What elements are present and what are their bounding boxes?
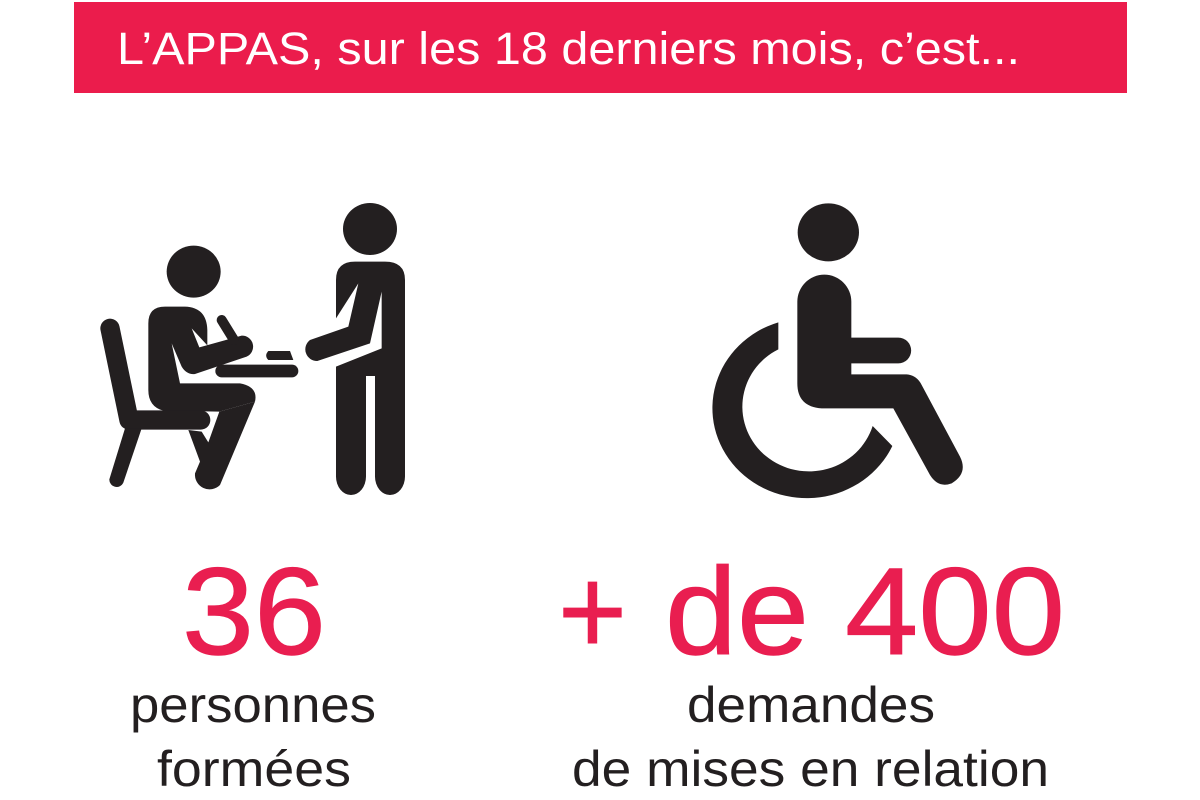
stat: + de 400: 400: [845, 543, 1065, 681]
label: demandes de mises en relation: de mises en relation: [572, 741, 1049, 797]
label: personnes formées: personnes: [130, 677, 376, 733]
title banner: [74, 2, 1127, 93]
stat: + de 400: +: [558, 543, 627, 681]
stat: + de 400: de: [665, 543, 809, 681]
title banner: L’APPAS, sur les 18 derniers mois, c’est...: [117, 23, 1020, 74]
label: demandes de mises en relation: [572, 677, 1049, 797]
stat: + de 400: [558, 543, 1065, 681]
label: personnes formées: [130, 677, 376, 797]
label: personnes formées: formées: [157, 741, 351, 797]
stat: 36: 36: [182, 543, 326, 681]
label: demandes de mises en relation: demandes: [687, 677, 935, 733]
icon: wheelchair user: [712, 203, 963, 498]
icon: seated student and standing trainer: [109, 203, 405, 495]
